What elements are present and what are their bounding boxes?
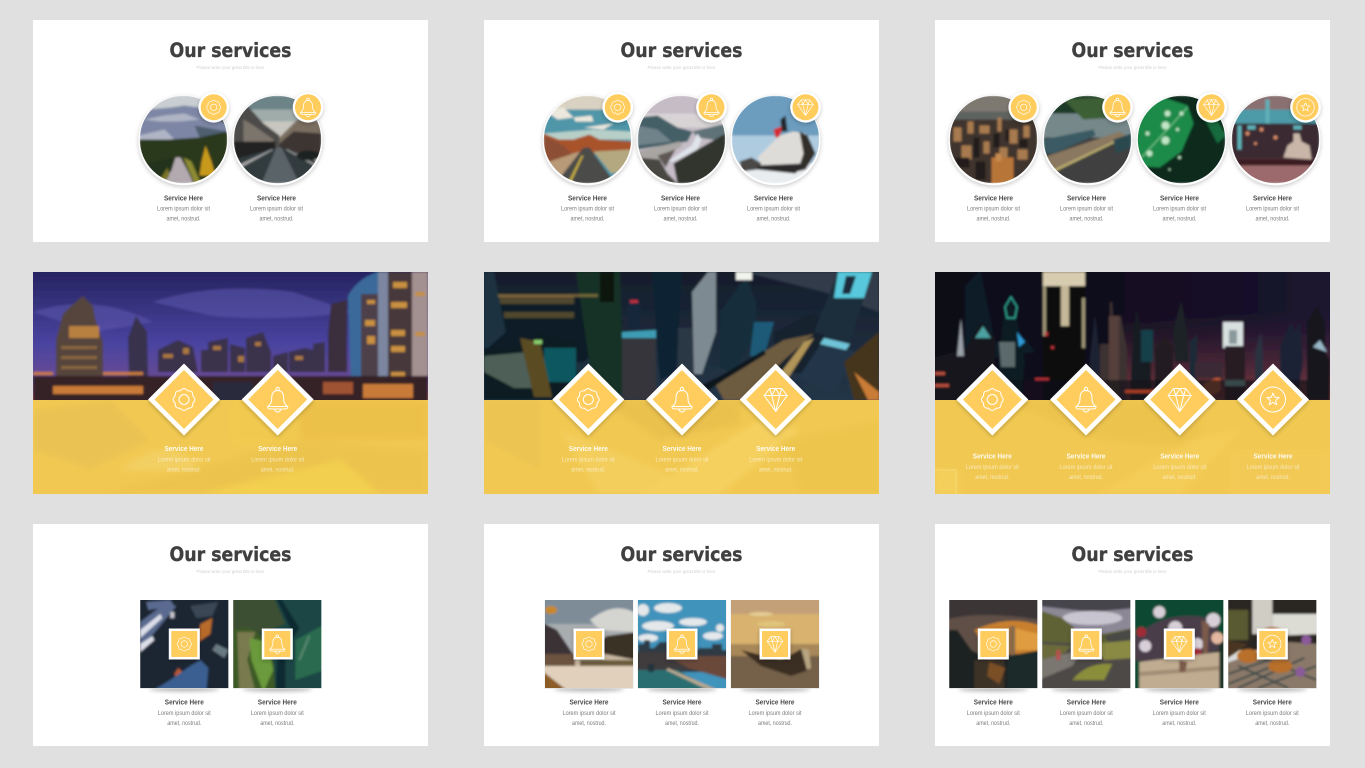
service 2 caption: Service Here (662, 446, 702, 453)
service 2 photo: aerial forest and river (229, 596, 325, 692)
service 1 caption (158, 446, 211, 474)
service 4 caption (1246, 454, 1300, 481)
service 1 caption: amet, nostrud. (976, 216, 1011, 222)
subtitle: Please write your great title is here (648, 65, 716, 70)
service 2 caption (1060, 196, 1113, 222)
service 1 caption (967, 196, 1020, 222)
service 1 caption: Service Here (570, 700, 609, 706)
service 1 caption: amet, nostrud. (572, 721, 606, 727)
service 1 icon badge: gear (1008, 92, 1039, 123)
service 1 caption: amet, nostrud. (975, 475, 1010, 481)
service 2 caption (1060, 454, 1113, 481)
photo: marina skyline at dusk (33, 272, 428, 400)
subtitle: Please write your great title is here (196, 65, 265, 70)
service 2 caption: amet, nostrud. (1070, 216, 1104, 222)
service 2 icon badge: bell (696, 92, 727, 123)
service 3 caption: amet, nostrud. (756, 216, 791, 222)
service 4 caption: Lorem ipsum dolor sit (1246, 206, 1299, 212)
service 3 caption: Lorem ipsum dolor sit (1153, 206, 1206, 212)
panel: squares with three services (484, 524, 879, 746)
service 2 icon: bell (666, 628, 698, 660)
service 3 caption: Lorem ipsum dolor sit (1153, 711, 1206, 717)
diamond: gem (740, 364, 812, 436)
subtitle: Please write your great title is here (196, 569, 265, 574)
service 3 caption: Lorem ipsum dolor sit (747, 206, 800, 212)
service 3 caption: amet, nostrud. (1162, 216, 1197, 222)
service 2 caption: amet, nostrud. (1069, 721, 1104, 727)
panel: squares with two services (33, 524, 428, 746)
service 3 caption (747, 196, 800, 222)
photo: night skyline (935, 272, 1330, 400)
service 3 caption: Service Here (756, 446, 795, 453)
service 2 caption: amet, nostrud. (1069, 475, 1103, 481)
service 1 caption: Lorem ipsum dolor sit (562, 711, 616, 717)
service 3 icon: gem (760, 628, 790, 660)
service 1 caption: amet, nostrud. (166, 216, 201, 222)
service 4 icon: star (1257, 628, 1288, 660)
service 2 caption: Lorem ipsum dolor sit (1060, 711, 1113, 717)
service 4 caption: amet, nostrud. (1256, 475, 1290, 481)
diamond: gem (1144, 364, 1216, 436)
service 2 caption: amet, nostrud. (260, 216, 294, 222)
panel: diamonds with three services over downtown photo (479, 267, 884, 494)
title: Our services (1072, 39, 1194, 62)
service 2 caption: amet, nostrud. (261, 468, 295, 474)
service 4 icon badge: star (1290, 92, 1321, 123)
service 2 caption (656, 700, 709, 727)
service 1 caption (967, 700, 1020, 727)
diamond: bell (1050, 364, 1122, 436)
service 2 caption: Service Here (1067, 196, 1106, 202)
service 1 caption: Lorem ipsum dolor sit (966, 465, 1019, 471)
service 4 caption: Lorem ipsum dolor sit (1246, 711, 1299, 717)
panel: circles with four services (935, 20, 1330, 242)
service 2 caption: amet, nostrud. (665, 468, 699, 474)
photo: downtown towers at night (484, 272, 879, 400)
service 4 photo: pastries on plaid cloth (1224, 596, 1320, 692)
service 3 caption: Service Here (1160, 196, 1199, 202)
service 3 caption: amet, nostrud. (759, 468, 793, 474)
service 2 caption: Service Here (258, 446, 297, 453)
panel: circles with two services (33, 20, 428, 242)
service 1 caption (562, 700, 616, 727)
panel: diamonds with two services over marina photo (28, 267, 433, 494)
service 1 caption: amet, nostrud. (571, 468, 606, 474)
service 1 caption (561, 196, 614, 222)
service 3 caption (1153, 454, 1207, 481)
title: Our services (1072, 543, 1194, 566)
service 1 photo: aerial city (948, 95, 1038, 185)
service 1 photo: sunset city (945, 596, 1041, 692)
service 1 icon: gear (574, 628, 604, 660)
yellow band with ghosted photo (484, 400, 879, 494)
service 2 caption: Service Here (1066, 454, 1106, 460)
service 3 caption: Lorem ipsum dolor sit (748, 711, 802, 717)
service 1 caption: Service Here (569, 446, 608, 453)
service 1 caption: Service Here (568, 196, 607, 202)
service 4 caption (1246, 196, 1299, 222)
service 3 photo: sepia shipwreck (727, 596, 823, 692)
service 3 caption (1153, 700, 1206, 727)
service 1 caption: Lorem ipsum dolor sit (967, 206, 1020, 212)
service 2 photo: city street (232, 95, 322, 185)
service 3 caption: amet, nostrud. (1162, 721, 1197, 727)
service 1 caption (562, 446, 615, 474)
panel: circles with three services (484, 20, 879, 242)
service 1 caption: Lorem ipsum dolor sit (561, 206, 614, 212)
diamond: gear (148, 364, 220, 436)
service 4 caption: Service Here (1253, 700, 1292, 706)
service 1 caption: Service Here (973, 454, 1012, 460)
service 2 caption: Service Here (662, 700, 702, 706)
service 1 caption: Service Here (974, 700, 1013, 706)
service 1 caption (158, 700, 211, 727)
service 2 photo: fjord cliff (636, 95, 726, 185)
service 3 icon badge: diamond (790, 92, 821, 123)
service 2 caption (251, 700, 304, 727)
service 1 caption: Lorem ipsum dolor sit (157, 206, 210, 212)
service 1 icon: gear (978, 628, 1009, 660)
diamond: star (1237, 364, 1309, 436)
service 1 caption (966, 454, 1019, 481)
service 2 caption: Lorem ipsum dolor sit (656, 711, 709, 717)
service 3 icon: gem (1164, 628, 1195, 660)
service 1 caption: Lorem ipsum dolor sit (967, 711, 1020, 717)
diamond: bell (646, 364, 718, 436)
service 2 caption: amet, nostrud. (664, 216, 698, 222)
service 2 caption: Lorem ipsum dolor sit (656, 458, 709, 464)
service 2 icon: bell (262, 628, 293, 660)
service 1 photo: desert road (542, 95, 632, 185)
service 4 caption: Service Here (1253, 196, 1292, 202)
service 2 caption (654, 196, 707, 222)
service 4 caption: amet, nostrud. (1255, 721, 1290, 727)
service 1 caption: amet, nostrud. (167, 468, 201, 474)
service 2 caption: Lorem ipsum dolor sit (251, 711, 304, 717)
service 3 caption (1153, 196, 1206, 222)
service 4 caption: Service Here (1254, 454, 1293, 460)
service 2 caption: Service Here (661, 196, 700, 202)
service 4 caption (1246, 700, 1299, 727)
service 2 icon: bell (1071, 628, 1102, 660)
service 3 caption (748, 700, 802, 727)
subtitle: Please write your great title is here (648, 569, 716, 574)
yellow band with ghosted photo (33, 400, 428, 494)
service 1 caption: Lorem ipsum dolor sit (158, 711, 211, 717)
service 4 caption: amet, nostrud. (1256, 216, 1290, 222)
service 2 caption: Lorem ipsum dolor sit (1060, 206, 1113, 212)
service 1 caption: Lorem ipsum dolor sit (562, 458, 615, 464)
service 3 caption: Service Here (754, 196, 793, 202)
service 1 caption: Service Here (974, 196, 1013, 202)
service 3 photo: flower basket (1131, 596, 1227, 692)
panel: squares with four services (935, 524, 1330, 746)
service 3 photo: leaf with water drops (1134, 95, 1226, 185)
service 1 icon: gear (169, 628, 200, 660)
service 3 caption: Service Here (1160, 700, 1199, 706)
service 2 photo: city and river (634, 596, 730, 692)
service 2 caption (656, 446, 709, 474)
service 3 photo: plane wreck (730, 95, 820, 185)
service 2 caption: Lorem ipsum dolor sit (1060, 465, 1113, 471)
subtitle: Please write your great title is here (1098, 569, 1167, 574)
title: Our services (620, 543, 742, 566)
service 3 caption: Service Here (1160, 454, 1199, 460)
diamond: gear (552, 364, 624, 436)
panel: diamonds with four services over night skyline (930, 267, 1335, 494)
diamond: gear (956, 364, 1028, 436)
service 1 caption: amet, nostrud. (570, 216, 605, 222)
service 2 icon badge: bell (293, 92, 323, 123)
service 1 caption (157, 196, 210, 222)
service 2 photo: mountain valley (1038, 596, 1134, 692)
service 2 caption: amet, nostrud. (665, 721, 699, 727)
subtitle: Please write your great title is here (1098, 65, 1167, 70)
service 3 caption: Lorem ipsum dolor sit (749, 458, 803, 464)
service 1 photo: aerial city with jeans (136, 596, 232, 692)
service 4 photo: bar interior (1230, 95, 1320, 185)
service 2 caption (251, 446, 305, 474)
service 2 caption (250, 196, 303, 222)
service 1 photo: mountain road (138, 95, 228, 185)
service 1 caption: amet, nostrud. (167, 721, 202, 727)
service 1 photo: misty lake (541, 596, 637, 692)
service 2 caption: Lorem ipsum dolor sit (250, 206, 303, 212)
service 2 caption: Lorem ipsum dolor sit (251, 458, 305, 464)
title: Our services (170, 543, 292, 566)
service 1 caption: Service Here (165, 700, 204, 706)
service 1 icon badge: gear (602, 92, 633, 123)
service 3 caption: amet, nostrud. (1163, 475, 1197, 481)
service 3 caption: Service Here (756, 700, 795, 706)
service 3 icon badge: diamond (1196, 92, 1227, 123)
service 1 caption: Service Here (164, 446, 204, 453)
title: Our services (170, 39, 292, 62)
service 1 caption: Lorem ipsum dolor sit (158, 458, 211, 464)
yellow band with ghosted photo (935, 400, 1330, 494)
service 3 caption: amet, nostrud. (758, 721, 792, 727)
service 2 caption: Lorem ipsum dolor sit (654, 206, 707, 212)
title: Our services (620, 39, 742, 62)
service 2 icon badge: bell (1102, 92, 1133, 123)
service 3 caption (749, 446, 803, 474)
service 2 caption: Service Here (257, 196, 296, 202)
service 3 caption: Lorem ipsum dolor sit (1153, 465, 1207, 471)
service 4 caption: Lorem ipsum dolor sit (1246, 465, 1300, 471)
service 2 caption: Service Here (258, 700, 297, 706)
service 2 caption: Service Here (1067, 700, 1106, 706)
service 2 photo: dock and boats (1042, 95, 1132, 185)
service 1 caption: Service Here (164, 196, 203, 202)
diamond: bell (242, 364, 314, 436)
service 1 icon badge: gear (198, 92, 229, 123)
service 1 caption: amet, nostrud. (976, 721, 1011, 727)
service 2 caption (1060, 700, 1113, 727)
service 2 caption: amet, nostrud. (260, 721, 295, 727)
